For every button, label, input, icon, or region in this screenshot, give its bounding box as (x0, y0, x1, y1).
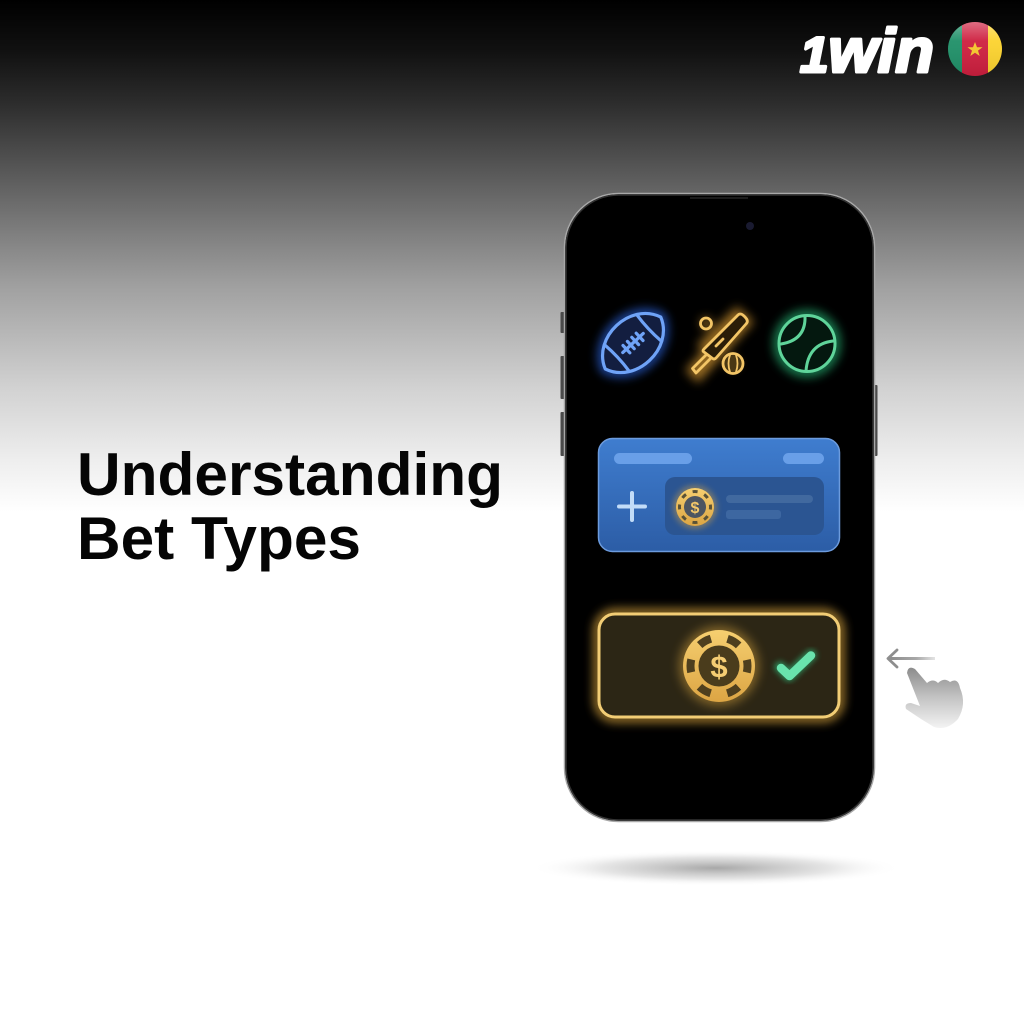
gold card frame (599, 614, 839, 717)
title: Bet Types (77, 504, 361, 572)
phone inner bezel (566, 195, 873, 820)
panel: blue bet slip card (598, 438, 840, 552)
tennis glow (778, 314, 836, 372)
icon: tennis ball (778, 314, 836, 372)
row line 1 (726, 495, 813, 503)
speaker (690, 197, 748, 199)
icon: swipe hand (906, 668, 963, 728)
cricket lines (692, 314, 747, 374)
gold card glow (598, 613, 840, 718)
icon: cricket bat and ball (692, 314, 747, 375)
cricket glow (693, 314, 746, 375)
icon: check mark (780, 655, 811, 676)
arrow: swipe left (888, 650, 935, 667)
title (77, 440, 503, 572)
phone (560, 194, 878, 822)
icon: small chip (673, 485, 717, 529)
football glow (589, 300, 677, 386)
camera (746, 222, 754, 230)
phone shadow (530, 850, 902, 886)
header bar left (614, 453, 692, 464)
panel: gold confirmed bet card (598, 613, 840, 718)
icon: small chip: $ (691, 500, 700, 517)
tennis outline (779, 316, 835, 372)
football outline (589, 300, 677, 386)
icon: american football (589, 300, 677, 386)
phone side buttons (560, 312, 878, 456)
icon: plus (619, 493, 645, 520)
inner bet row (665, 477, 824, 535)
icon: large chip: $ (710, 649, 728, 684)
icon: large chip (679, 626, 759, 706)
title: Understanding (77, 440, 503, 508)
phone body (564, 194, 874, 822)
row line 2 (726, 510, 781, 519)
header bar right (783, 453, 824, 464)
icon: Cameroon flag (948, 22, 1003, 76)
logo: 1win: 1win (800, 17, 934, 86)
